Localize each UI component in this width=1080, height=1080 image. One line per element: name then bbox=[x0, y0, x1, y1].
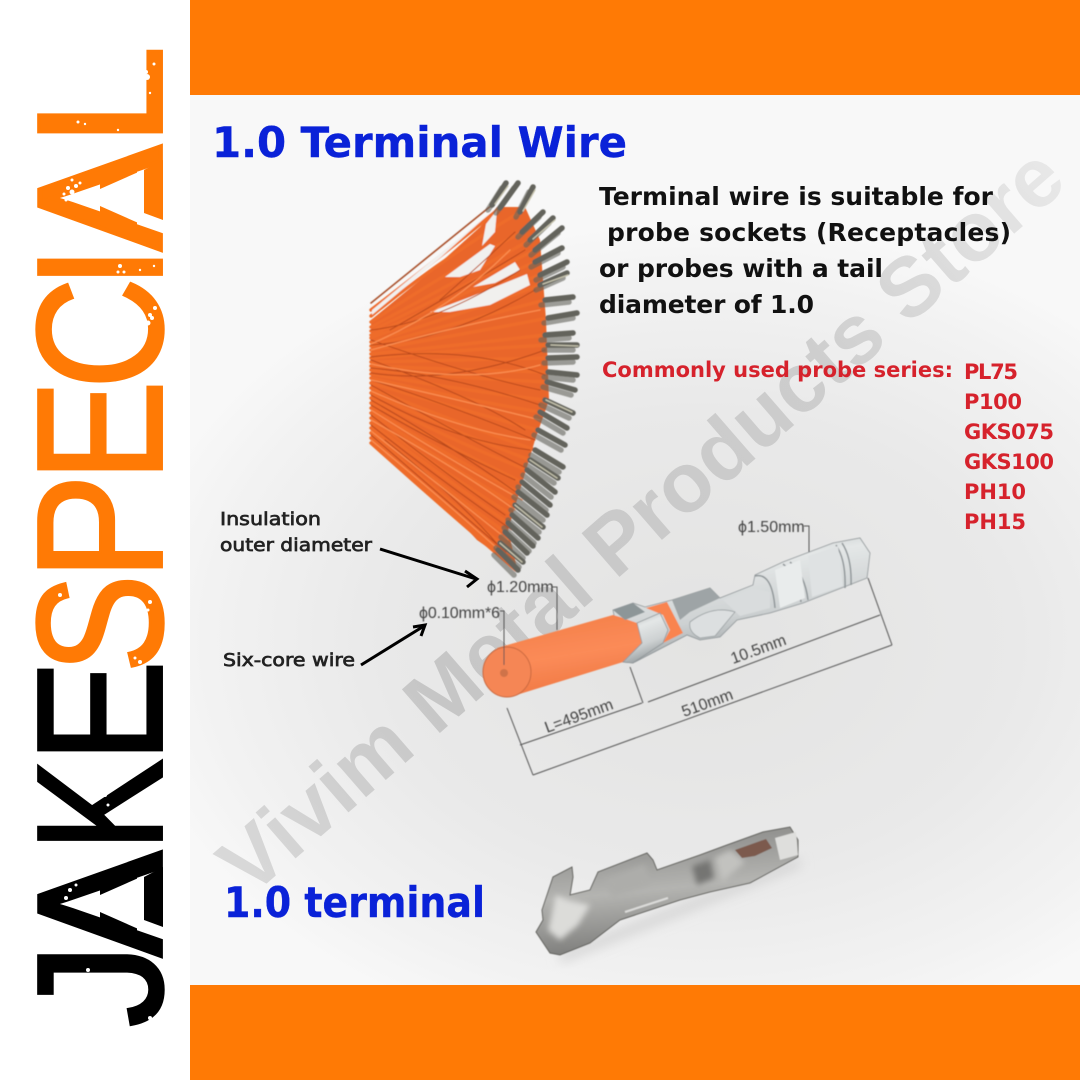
arrow: insulation to 1.20mm bbox=[380, 549, 477, 587]
probe series list: PH10 bbox=[964, 480, 1026, 504]
wire gaps bbox=[372, 207, 530, 315]
logo: JAKESPECIAL vertical wordmark: S bbox=[0, 574, 200, 673]
probe series list: P100 bbox=[964, 390, 1022, 414]
logo: JAKESPECIAL vertical wordmark: A bbox=[3, 852, 199, 956]
logo: JAKESPECIAL vertical wordmark: P bbox=[0, 474, 200, 580]
logo: JAKESPECIAL vertical wordmark: E bbox=[1, 380, 200, 482]
photo: orange terminal wire bundle bbox=[371, 183, 578, 575]
heading: 1.0 Terminal Wire: 1.0 Terminal Wire bbox=[212, 118, 627, 167]
probe series list: PH15 bbox=[964, 510, 1026, 534]
probe series list: GKS100 bbox=[964, 450, 1054, 474]
orange cylinder bbox=[483, 602, 683, 697]
probe series list: Commonly used probe series: bbox=[602, 358, 953, 382]
diagram: terminal with dimensions bbox=[419, 519, 892, 775]
logo: JAKESPECIAL vertical wordmark: J bbox=[0, 943, 200, 1027]
arrow: six-core to 0.10mm bbox=[361, 625, 425, 665]
label: insulation outer diameter: Insulation bbox=[220, 509, 321, 530]
dimension labels: ϕ1.50mm bbox=[738, 519, 805, 536]
description text bbox=[599, 182, 1011, 319]
dimension labels bbox=[419, 519, 805, 737]
panel: main background bbox=[190, 95, 1080, 985]
description text: or probes with a tail bbox=[599, 254, 883, 283]
dimension labels: ϕ1.20mm bbox=[487, 579, 554, 596]
bottom orange band bbox=[190, 985, 1080, 1080]
dimension lines bbox=[500, 526, 892, 775]
logo: JAKESPECIAL vertical wordmark bbox=[0, 45, 200, 1027]
description text: probe sockets (Receptacles) bbox=[607, 218, 1011, 247]
dimension labels: 510mm bbox=[680, 687, 736, 721]
terminal metal silhouette bbox=[613, 538, 870, 663]
probe series list: GKS075 bbox=[964, 420, 1054, 444]
probe series list bbox=[602, 358, 1054, 534]
description text: Terminal wire is suitable for bbox=[599, 182, 994, 211]
dimension labels: L=495mm bbox=[543, 696, 616, 737]
heading: 1.0 terminal: 1.0 terminal bbox=[224, 878, 485, 927]
dimension labels: 10.5mm bbox=[729, 632, 789, 668]
top orange band bbox=[190, 0, 1080, 95]
logo: JAKESPECIAL vertical wordmark: E bbox=[1, 660, 200, 763]
logo: JAKESPECIAL vertical wordmark: L bbox=[0, 45, 200, 147]
watermark: Vivim Metal Products Store bbox=[200, 128, 1080, 912]
logo: JAKESPECIAL vertical wordmark: C bbox=[1, 277, 200, 389]
label: insulation outer diameter bbox=[220, 509, 373, 556]
logo: JAKESPECIAL vertical wordmark: I bbox=[0, 245, 200, 289]
logo: JAKESPECIAL vertical wordmark: K bbox=[0, 759, 200, 851]
probe series list: PL75 bbox=[964, 360, 1018, 384]
description text: diameter of 1.0 bbox=[599, 290, 814, 319]
label: insulation outer diameter: outer diameter bbox=[220, 535, 373, 556]
logo: JAKESPECIAL vertical wordmark: A bbox=[3, 146, 199, 250]
dimension labels: ϕ0.10mm*6 bbox=[419, 605, 500, 622]
crimp collar bbox=[613, 603, 668, 663]
photo: bare 1.0 terminal bbox=[536, 827, 800, 958]
label: six-core wire: Six-core wire bbox=[223, 650, 355, 671]
